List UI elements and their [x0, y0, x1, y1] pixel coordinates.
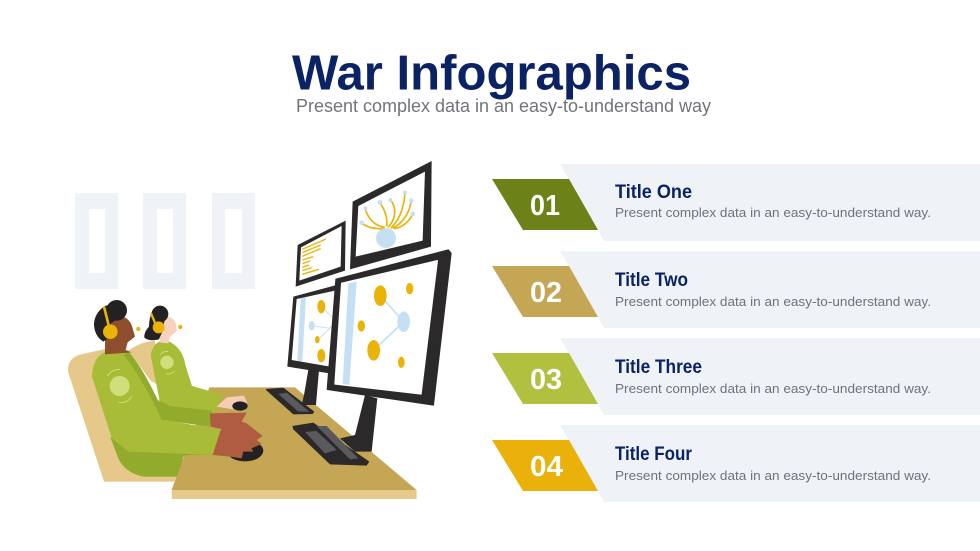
monitors [287, 161, 451, 405]
monitor: left graph [287, 285, 337, 374]
badge 04 [492, 440, 598, 491]
monitor stands [302, 370, 377, 452]
monitor: network tree [350, 161, 432, 269]
person one body [92, 350, 220, 477]
badge 01 [492, 179, 598, 230]
desk front edge [172, 455, 270, 490]
description one: Present complex data in an easy-to-understand way. [615, 205, 931, 220]
chairs [68, 341, 180, 482]
panel 4 [560, 425, 980, 502]
heading four: Title Four [615, 444, 693, 465]
heading two: Title Two [615, 270, 688, 291]
badge 02 [492, 266, 598, 317]
number 04: 04 [530, 451, 563, 483]
subtitle: Present complex data in an easy-to-understand way [296, 96, 711, 116]
description three: Present complex data in an easy-to-understand way. [615, 381, 931, 396]
monitor: code lines [296, 221, 346, 287]
row 4 [492, 425, 980, 502]
description two: Present complex data in an easy-to-understand way. [615, 294, 931, 309]
number 03: 03 [530, 364, 562, 396]
panel 3 [560, 338, 980, 415]
head: person one [94, 300, 140, 354]
desk [172, 387, 417, 499]
background windows [75, 193, 255, 289]
keyboards [266, 388, 369, 466]
monitor: main graph [327, 250, 451, 405]
row 2 [492, 251, 980, 328]
heading three: Title Three [615, 357, 702, 378]
panel 2 [560, 251, 980, 328]
illustration: operators at desk [68, 161, 451, 499]
head: person two [144, 306, 182, 343]
heading one: Title One [615, 182, 692, 203]
person two [151, 340, 223, 427]
row 3 [492, 338, 980, 415]
number 01: 01 [530, 190, 560, 222]
panel 1 [560, 164, 980, 241]
arms and hands [210, 396, 263, 461]
number 02: 02 [530, 277, 562, 309]
row 1 [492, 164, 980, 241]
title: War Infographics [292, 46, 691, 100]
description four: Present complex data in an easy-to-understand way. [615, 468, 931, 483]
badge 03 [492, 353, 598, 404]
